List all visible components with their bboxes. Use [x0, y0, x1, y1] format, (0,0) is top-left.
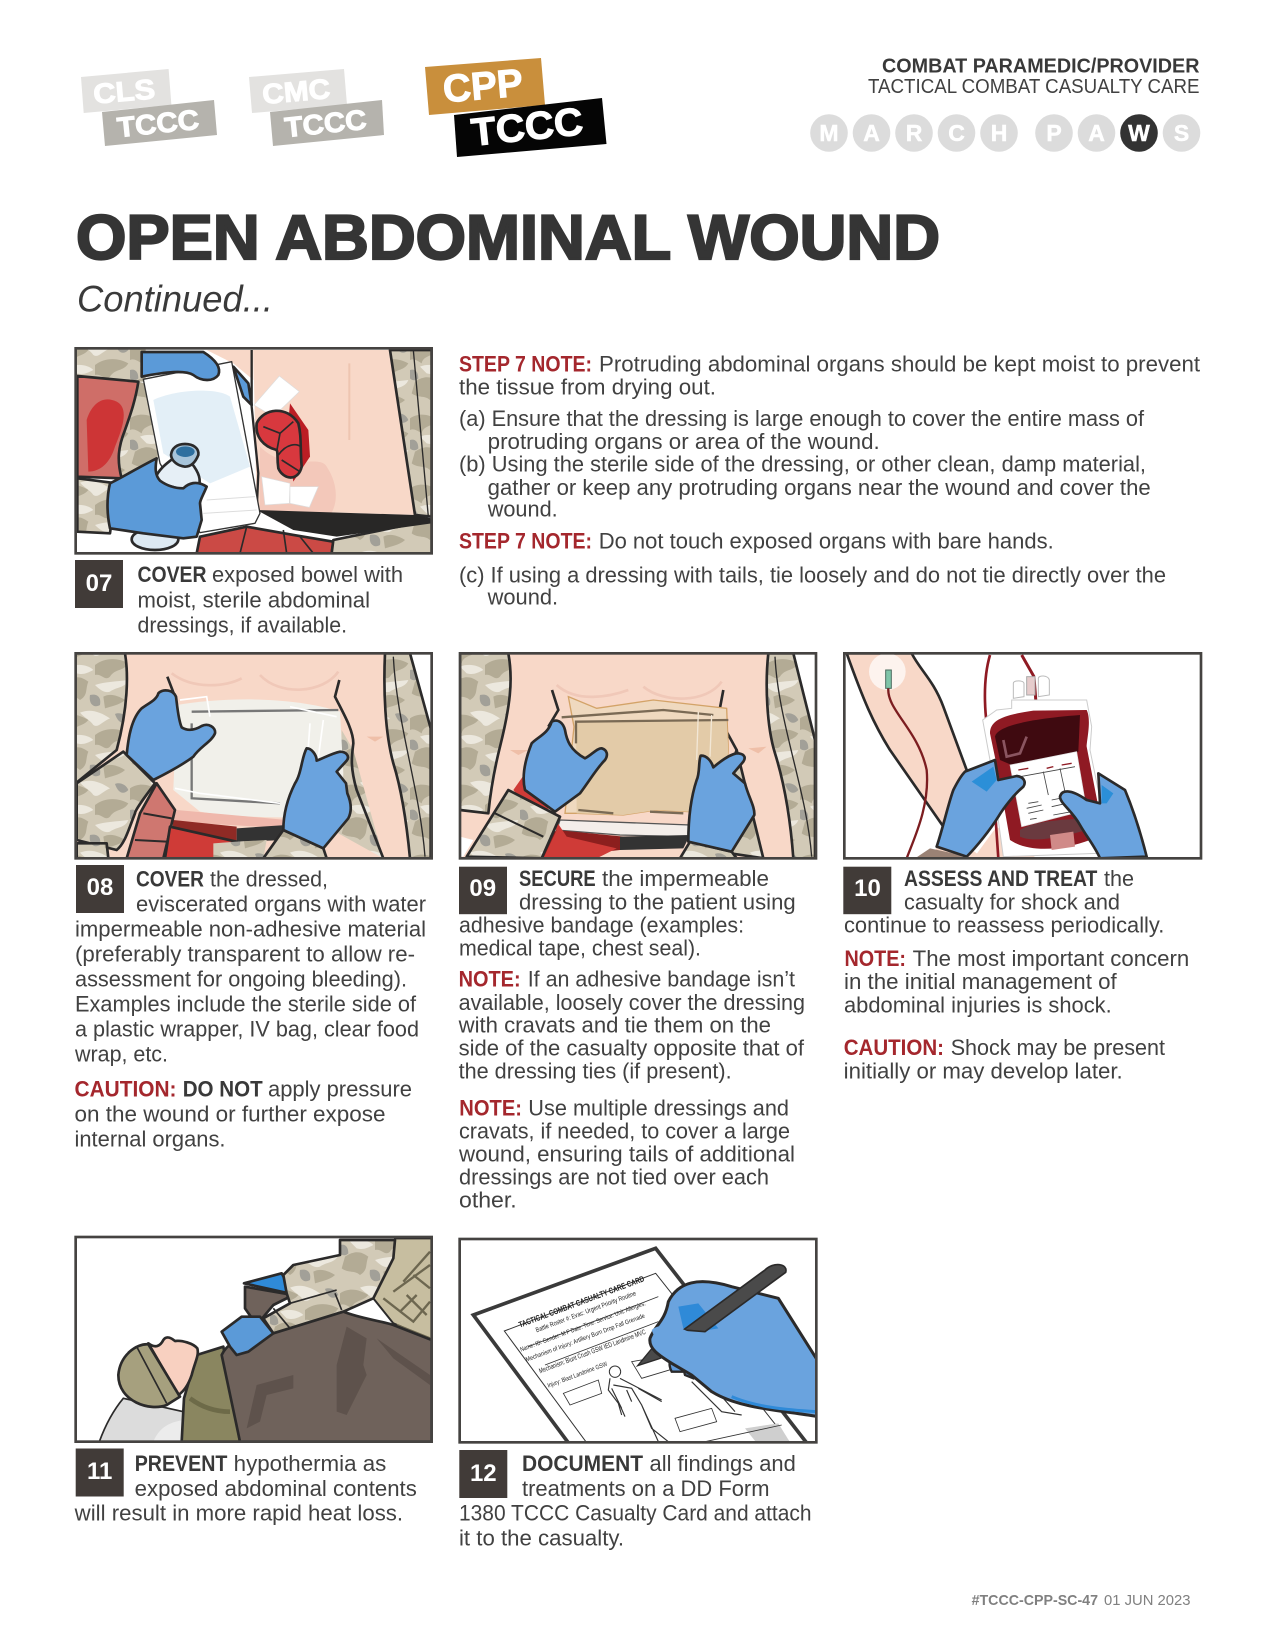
logo: CLS TCCC: [81, 69, 217, 146]
step 08 text: Examples include the sterile side of: [75, 992, 417, 1017]
step 09 text: other.: [459, 1188, 517, 1212]
panel: step 08 illustration: [76, 653, 432, 858]
step 08 text: CAUTION:: [74, 1077, 176, 1102]
panel: step 12 illustration: Injury: Blast Landmine GSW: [547, 1361, 608, 1390]
panel: step 10 illustration: [844, 653, 1201, 858]
MARCH PAWS indicator: H: [991, 120, 1007, 146]
step 09 text: cravats, if needed, to cover a large: [459, 1119, 790, 1144]
step 08 text: wrap, etc.: [74, 1042, 168, 1067]
step 09 text: the dressing ties (if present).: [459, 1058, 732, 1083]
step 10 text: abdominal injuries is shock.: [844, 992, 1112, 1017]
step 11 text: [74, 1451, 417, 1526]
step 7 notes text block: Do not touch exposed organs with bare hands.: [599, 528, 1054, 553]
step 07 number: [75, 560, 123, 608]
step 09 text: with cravats and tie them on the: [458, 1013, 771, 1038]
step 10 text: [844, 866, 1189, 1084]
step 10 text: continue to reassess periodically.: [844, 912, 1164, 937]
MARCH PAWS indicator: [810, 114, 1200, 152]
step 12 text: DOCUMENT: [522, 1451, 644, 1476]
step 12 text: all findings and: [650, 1451, 796, 1476]
header: course name: [868, 56, 1200, 98]
step 07 text: [138, 562, 403, 638]
step 08 text: (preferably transparent to allow re-: [75, 942, 415, 967]
step 10 text: NOTE:: [844, 946, 906, 971]
MARCH PAWS indicator: C: [948, 120, 965, 146]
logo: CPP TCCC: TCCC: [469, 100, 585, 155]
step 09 text: wound, ensuring tails of additional: [458, 1141, 795, 1166]
step 10 text: CAUTION:: [844, 1035, 944, 1060]
step 09 text: medical tape, chest seal).: [459, 935, 701, 960]
panel: step 12 illustration: Battle Roster #: Evac: Urgent Priority Routine: [535, 1290, 637, 1334]
step 07 text: exposed bowel with: [212, 562, 403, 587]
step 09 number: 09: [469, 875, 496, 902]
step 7 notes text block: STEP 7 NOTE:: [459, 528, 592, 553]
step 10 text: in the initial management of: [844, 969, 1118, 994]
step 11 number: 11: [87, 1458, 112, 1485]
step 08 text: the dressed,: [210, 867, 328, 892]
step 08 text: [74, 867, 426, 1152]
step 09 text: [458, 866, 805, 1212]
panel: step 12 illustration: TACTICAL COMBAT CASUALTY CARE CARD: [517, 1273, 646, 1330]
step 7 notes text block: gather or keep any protruding organs near the wound and cover the: [488, 475, 1151, 500]
step 07 text: COVER: [138, 562, 207, 587]
step 12 text: treatments on a DD Form: [522, 1476, 770, 1501]
logo: CMC TCCC: TCCC: [283, 104, 368, 143]
MARCH PAWS indicator: W: [1128, 120, 1150, 146]
step 08 text: apply pressure: [268, 1077, 412, 1102]
step 7 notes text block: [459, 352, 1200, 610]
title: OPEN ABDOMINAL WOUND: [76, 203, 940, 273]
step 7 notes text block: (a) Ensure that the dressing is large enough to cover the entire mass of: [459, 406, 1145, 431]
step 09 text: side of the casualty opposite that of: [459, 1036, 805, 1061]
step 08 text: eviscerated organs with water: [136, 892, 426, 917]
step 08 text: internal organs.: [74, 1127, 226, 1152]
step 12 number: [459, 1450, 507, 1498]
panel: step 07 illustration: [76, 348, 432, 553]
panel: step 12 illustration: Mechanism: Blunt Crush GSW IED Landmine MVC: [538, 1329, 647, 1375]
panel: step 12 illustration: Name: ID: Gender: M F Date: Time: Service: Unit: Allergies:: [519, 1300, 647, 1354]
panel: step 11 illustration: [76, 1237, 432, 1442]
header: course name: COMBAT PARAMEDIC/PROVIDER: [882, 56, 1200, 78]
step 12 text: it to the casualty.: [459, 1526, 624, 1551]
step 10 text: the: [1104, 866, 1134, 891]
step 09 number: [459, 867, 507, 914]
step 08 number: [76, 865, 124, 913]
step 11 text: PREVENT: [135, 1451, 228, 1476]
step 07 text: dressings, if available.: [138, 612, 347, 638]
step 07 number: 07: [86, 570, 112, 597]
step 08 text: assessment for ongoing bleeding).: [75, 967, 407, 992]
step 08 text: DO NOT: [183, 1077, 263, 1102]
header: course name: TACTICAL COMBAT CASUALTY CARE: [868, 76, 1200, 98]
step 7 notes text block: Protruding abdominal organs should be kept moist to prevent: [599, 352, 1200, 376]
step 10 number: [843, 867, 891, 914]
step 08 text: impermeable non-adhesive material: [75, 917, 426, 942]
panel: step 12 illustration: [460, 1239, 818, 1445]
step 7 notes text block: wound.: [487, 584, 558, 610]
logo: CLS TCCC: CLS: [92, 73, 156, 110]
step 10 text: casualty for shock and: [904, 889, 1120, 914]
step 7 notes text block: wound.: [487, 497, 558, 522]
step 07 text: moist, sterile abdominal: [138, 588, 370, 612]
step 09 text: adhesive bandage (examples:: [459, 913, 744, 938]
panel: step 09 illustration: [460, 653, 816, 858]
step 09 text: If an adhesive bandage isn’t: [528, 967, 795, 992]
step 10 text: initially or may develop later.: [844, 1058, 1123, 1084]
logo: CPP TCCC: CPP: [441, 62, 525, 111]
step 7 notes text block: (b) Using the sterile side of the dressing, or other clean, damp material,: [459, 452, 1146, 477]
step 10 text: Shock may be present: [951, 1035, 1165, 1060]
step 09 text: Use multiple dressings and: [528, 1096, 789, 1121]
step 09 text: SECURE: [519, 866, 596, 891]
step 7 notes text block: (c) If using a dressing with tails, tie loosely and do not tie directly over the: [459, 563, 1166, 588]
step 09 text: NOTE:: [459, 1096, 522, 1121]
step 7 notes text block: protruding organs or area of the wound.: [488, 429, 880, 454]
step 09 text: dressings are not tied over each: [459, 1164, 769, 1189]
step 09 text: NOTE:: [459, 967, 521, 992]
step 7 notes text block: the tissue from drying out.: [459, 374, 716, 399]
step 12 number: 12: [470, 1460, 497, 1487]
step 08 text: a plastic wrapper, IV bag, clear food: [75, 1017, 419, 1042]
step 08 number: 08: [87, 874, 113, 901]
subtitle: Continued...: [77, 278, 273, 320]
step 09 text: dressing to the patient using: [519, 890, 796, 914]
step 10 text: The most important concern: [913, 946, 1189, 971]
footer reference: #TCCC-CPP-SC-47: [972, 1592, 1098, 1609]
panel: step 12 illustration: Mechanism of Injury: Artillery Burn Drop Fall Grenade: [525, 1312, 646, 1364]
step 10 text: ASSESS AND TREAT: [904, 866, 1098, 891]
logo: CMC TCCC: [249, 69, 384, 146]
MARCH PAWS indicator: A: [863, 120, 880, 146]
MARCH PAWS indicator: P: [1046, 120, 1062, 146]
MARCH PAWS indicator: M: [819, 120, 839, 146]
MARCH PAWS indicator: S: [1174, 120, 1189, 146]
logo: CPP TCCC: [425, 58, 606, 157]
MARCH PAWS indicator: R: [906, 120, 923, 146]
step 11 number: [76, 1448, 124, 1496]
logo: CMC TCCC: CMC: [261, 73, 331, 110]
step 10 number: 10: [854, 875, 881, 902]
step 11 text: will result in more rapid heat loss.: [74, 1500, 403, 1526]
step 12 text: [459, 1451, 812, 1551]
step 11 text: hypothermia as: [234, 1451, 386, 1476]
logo: CLS TCCC: TCCC: [116, 104, 200, 143]
step 09 text: available, loosely cover the dressing: [459, 990, 805, 1015]
footer reference: 01 JUN 2023: [1104, 1592, 1190, 1609]
step 08 text: COVER: [136, 867, 204, 892]
MARCH PAWS indicator: A: [1088, 120, 1105, 146]
step 11 text: exposed abdominal contents: [135, 1476, 417, 1501]
footer reference: [972, 1592, 1190, 1609]
step 7 notes text block: STEP 7 NOTE:: [459, 352, 592, 376]
step 08 text: on the wound or further expose: [74, 1102, 386, 1127]
step 09 text: the impermeable: [602, 866, 769, 891]
step 12 text: 1380 TCCC Casualty Card and attach: [459, 1500, 812, 1526]
